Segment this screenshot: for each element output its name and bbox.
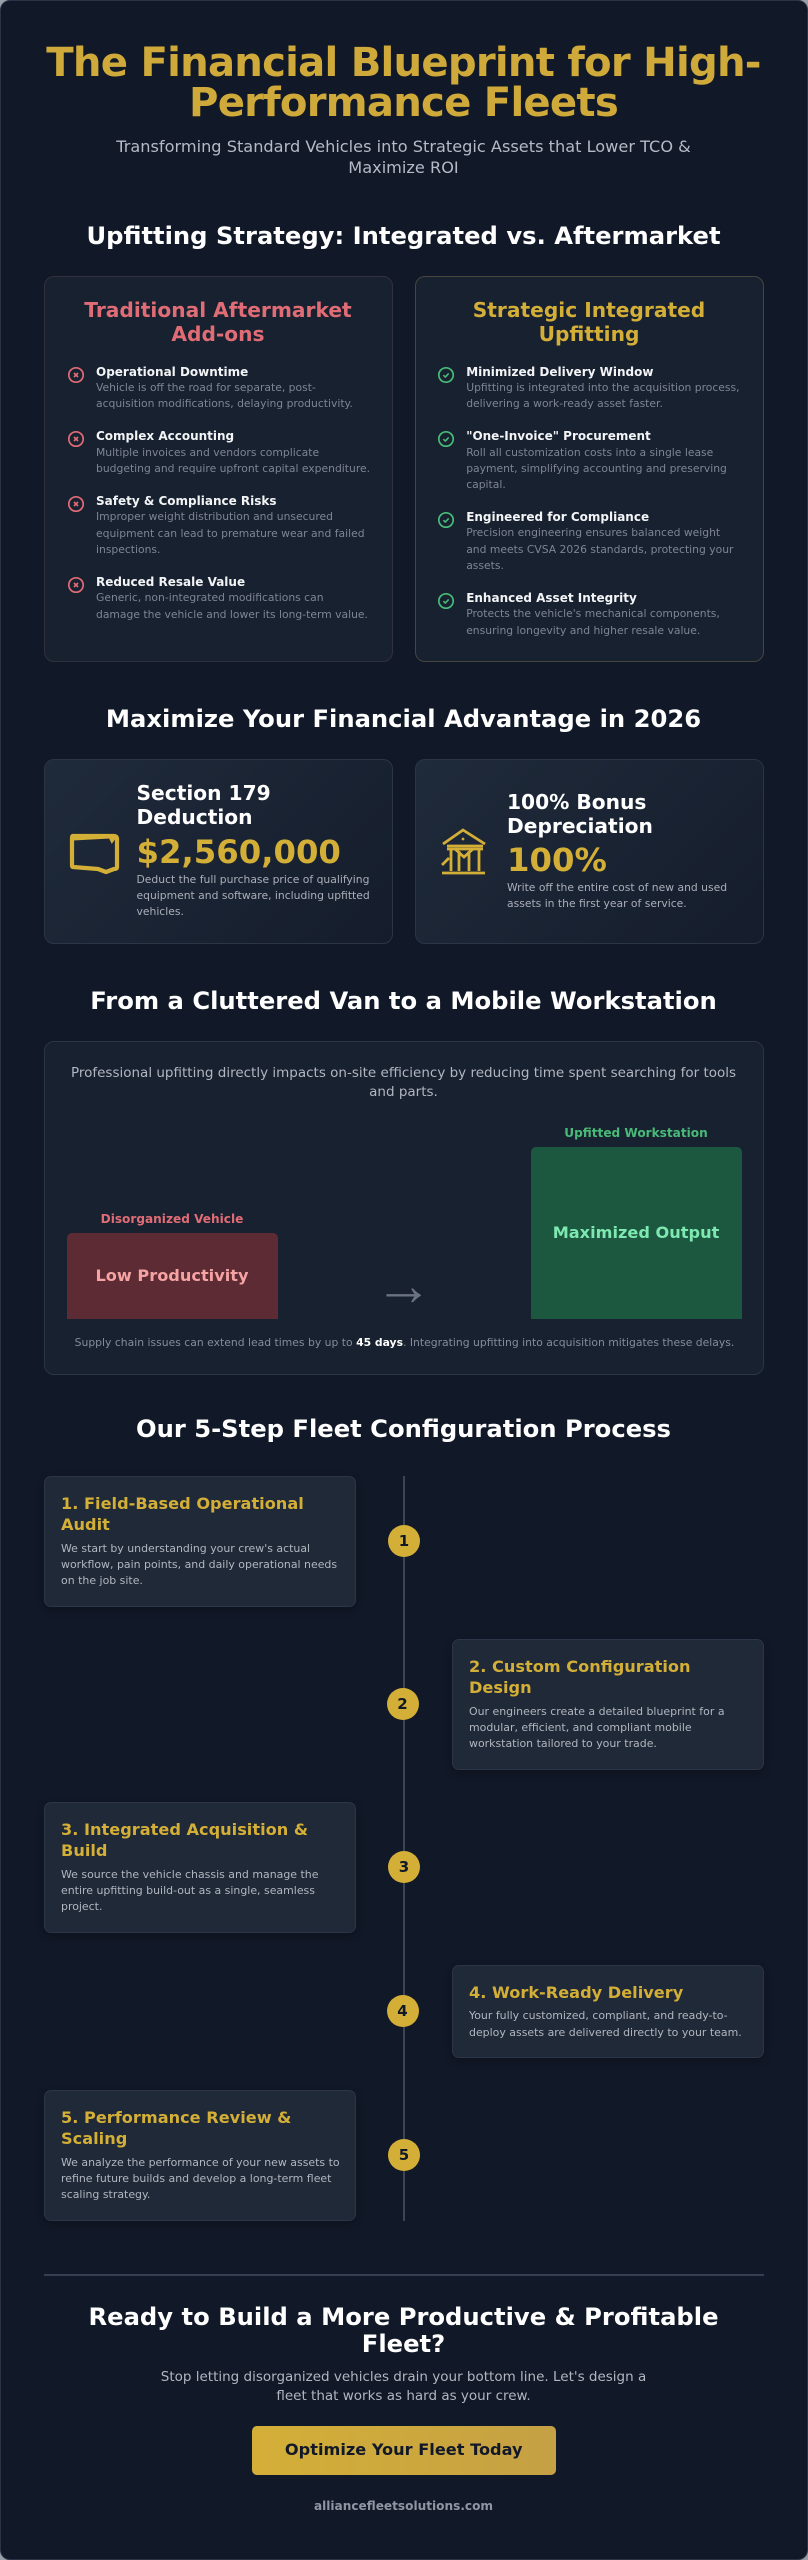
chart intro text: and parts. [369,1084,438,1100]
step 1 node [388,1524,420,1556]
website: alliancefleetsolutions.com [314,2498,493,2512]
item: one invoice procurement [466,429,727,491]
step 1 card: on the job site. [61,1574,143,1587]
bonus value: 100% [507,840,607,878]
panel heading: traditional: Add-ons [171,322,265,346]
item: engineered for compliance: and meets CVSA 2026 standards, protecting your [466,543,733,556]
step 4 card: 4. Work-Ready Delivery [469,1982,683,2002]
item: safety and compliance: Safety & Compliance Risks [96,494,277,508]
item: reduced resale value [96,575,368,621]
bonus description [507,880,727,910]
step 3 card: Build [61,1841,107,1860]
title: Performance Fleets [189,80,618,126]
bar: maximized output: Maximized Output [553,1222,719,1242]
step 3 card: entire upfitting build-out as a single, seamless [61,1884,315,1897]
step 4 card: Your fully customized, compliant, and ready-to- [469,2009,728,2022]
section 179 description [136,872,370,918]
bonus description: assets in the first year of service. [507,897,687,910]
chart intro text: Professional upfitting directly impacts on-site efficiency by reducing time spent searching for tools [71,1064,736,1080]
step 3 card: 3. Integrated Acquisition & [61,1820,308,1838]
step 5 node: 5 [399,2146,409,2164]
divider [44,2274,764,2276]
panel: productivity chart [44,1040,764,1374]
step 2 card: Design [469,1678,532,1697]
cta heading: Ready to Build a More Productive & Profitable [88,2302,719,2330]
bonus title: Depreciation [507,814,653,838]
step 2 card: workstation tailored to your trade. [469,1737,657,1750]
item: one invoice procurement: "One-Invoice" Procurement [466,429,651,443]
section 179 title: Section 179 [136,780,271,804]
item: minimized delivery window: delivering a work-ready asset faster. [466,397,663,410]
step 5 node [388,2138,420,2170]
icon: bank [441,828,486,874]
step 1 card [44,1476,356,1606]
step 4 node [386,1994,418,2026]
item: safety and compliance: Improper weight distribution and unsecured [96,510,333,523]
step 5 card: We analyze the performance of your new assets to [61,2156,340,2169]
step 2 node: 2 [397,1694,408,1712]
bonus title: 100% Bonus [507,790,646,814]
item: one invoice procurement: payment, simplifying accounting and preserving [466,462,727,475]
cta text: fleet that works as hard as your crew. [276,2388,531,2404]
item: reduced resale value: Generic, non-integrated modifications can [96,591,324,604]
label: upfitted workstation: Upfitted Workstation [564,1126,708,1140]
step 1 card: Audit [61,1515,110,1534]
panel heading: traditional: Traditional Aftermarket [84,298,352,322]
heading: upfitting strategy: Upfitting Strategy: Integrated vs. Aftermarket [86,220,721,250]
cta heading [88,2302,719,2358]
section 179 title [136,780,271,829]
item: engineered for compliance: Precision engineering ensures balanced weight [466,526,720,539]
item: reduced resale value: Reduced Resale Value [96,575,245,589]
icon: check circle 3 [438,512,454,528]
icon: check circle 2 [438,431,454,447]
step 4 node: 4 [397,2002,408,2020]
title [46,40,761,126]
bonus title [507,790,653,838]
subtitle [116,136,691,177]
panel heading: strategic: Upfitting [539,322,639,346]
section 179 value: $2,560,000 [136,832,341,870]
icon: check circle 1 [438,367,454,383]
bar: maximized output [530,1146,742,1318]
panel heading: strategic [473,298,705,346]
item: engineered for compliance: assets. [466,559,504,572]
icon: x circle 4 [68,577,84,593]
item: one invoice procurement: capital. [466,478,506,491]
label: disorganized vehicle: Disorganized Vehicle [101,1212,243,1226]
cta text [161,2368,646,2404]
step 1 card: We start by understanding your crew's actual [61,1542,310,1555]
section 179 description: Deduct the full purchase price of qualifying [136,872,369,886]
item: safety and compliance: equipment can lead to premature wear and failed [96,527,365,540]
step 3 card [44,1802,356,1932]
heading: financial advantage: Maximize Your Financial Advantage in 2026 [106,704,701,732]
bonus description: Write off the entire cost of new and used [507,880,727,894]
item: operational downtime: Operational Downtime [96,364,248,378]
panel: strategic integrated [414,276,764,662]
item: safety and compliance [96,494,365,556]
arrow: → [374,1252,432,1318]
icon: x circle 3 [68,496,84,512]
step 2 card [452,1638,764,1770]
step 3 node: 3 [399,1858,409,1876]
timeline line [402,1476,404,2220]
chart footnote: Supply chain issues can extend lead times by up to 45 days. Integrating upfitting into acquisition mitigates these delays. [75,1336,734,1348]
panel: section 179 [44,758,392,944]
step 1 card: workflow, pain points, and daily operational needs [61,1558,337,1571]
item: reduced resale value: damage the vehicle and lower its long-term value. [96,608,368,621]
step 5 card: refine future builds and develop a long-term fleet [61,2172,331,2185]
heading: 5-step process: Our 5-Step Fleet Configuration Process [136,1414,671,1442]
step 3 node [388,1850,420,1882]
item: enhanced asset integrity: Protects the vehicle's mechanical components, [466,607,720,620]
section 179 description: equipment and software, including upfitted [136,889,370,902]
panel: bonus depreciation [414,758,764,944]
section 179 description: vehicles. [136,905,184,918]
panel heading: traditional [84,298,352,346]
item: complex accounting: Multiple invoices and vendors complicate [96,446,319,459]
item: complex accounting: Complex Accounting [96,429,234,443]
item: one invoice procurement: Roll all customization costs into a single lease [466,446,713,459]
step 1 node: 1 [399,1532,409,1550]
step 3 card: We source the vehicle chassis and manage the [61,1868,318,1881]
cta text: Stop letting disorganized vehicles drain your bottom line. Let's design a [161,2368,646,2384]
item: complex accounting: budgeting and require upfront capital expenditure. [96,462,370,475]
bar: low productivity: Low Productivity [95,1266,249,1284]
item: safety and compliance: inspections. [96,543,160,556]
step 4 card [452,1964,764,2058]
panel: traditional aftermarket [44,276,392,662]
step 4 card: deploy assets are delivered directly to your team. [469,2026,742,2038]
step 2 card: 2. Custom Configuration [469,1656,690,1676]
item: minimized delivery window: Minimized Delivery Window [466,364,653,378]
icon: check circle 4 [438,593,454,609]
item: minimized delivery window [466,364,740,410]
step 5 card: Scaling [61,2129,127,2148]
step 2 node [386,1688,418,1720]
cta button [252,2426,556,2474]
title: The Financial Blueprint for High- [46,40,761,86]
heading: cluttered van: From a Cluttered Van to a Mobile Workstation [90,986,717,1014]
item: operational downtime [96,364,353,410]
step 2 card: modular, efficient, and compliant mobile [469,1721,692,1734]
step 5 card: 5. Performance Review & [61,2108,291,2126]
item: enhanced asset integrity: ensuring longevity and higher resale value. [466,624,700,637]
step 1 card: 1. Field-Based Operational [61,1494,304,1512]
item: engineered for compliance [466,510,734,572]
icon: x circle 2 [68,431,84,447]
item: engineered for compliance: Engineered for Compliance [466,510,649,524]
bar: low productivity [66,1232,278,1318]
cta heading: Fleet? [362,2329,445,2358]
cta button: Optimize Your Fleet Today [285,2440,523,2459]
step 5 card [44,2090,356,2220]
subtitle: Transforming Standard Vehicles into Strategic Assets that Lower TCO & [116,136,691,156]
icon: x circle 1 [68,367,84,383]
item: operational downtime: acquisition modifications, delaying productivity. [96,397,353,410]
subtitle: Maximize ROI [348,158,459,177]
step 2 card: Our engineers create a detailed blueprint for a [469,1705,725,1718]
step 5 card: scaling strategy. [61,2188,150,2201]
item: complex accounting [96,429,370,475]
item: enhanced asset integrity [466,591,720,637]
icon: wallet [70,834,120,874]
item: minimized delivery window: Upfitting is integrated into the acquisition process, [466,381,740,394]
panel heading: strategic: Strategic Integrated [473,298,705,322]
chart intro text [71,1064,736,1100]
item: enhanced asset integrity: Enhanced Asset Integrity [466,591,637,605]
section 179 title: Deduction [136,805,253,829]
item: operational downtime: Vehicle is off the road for separate, post- [96,381,316,394]
step 3 card: project. [61,1900,102,1913]
